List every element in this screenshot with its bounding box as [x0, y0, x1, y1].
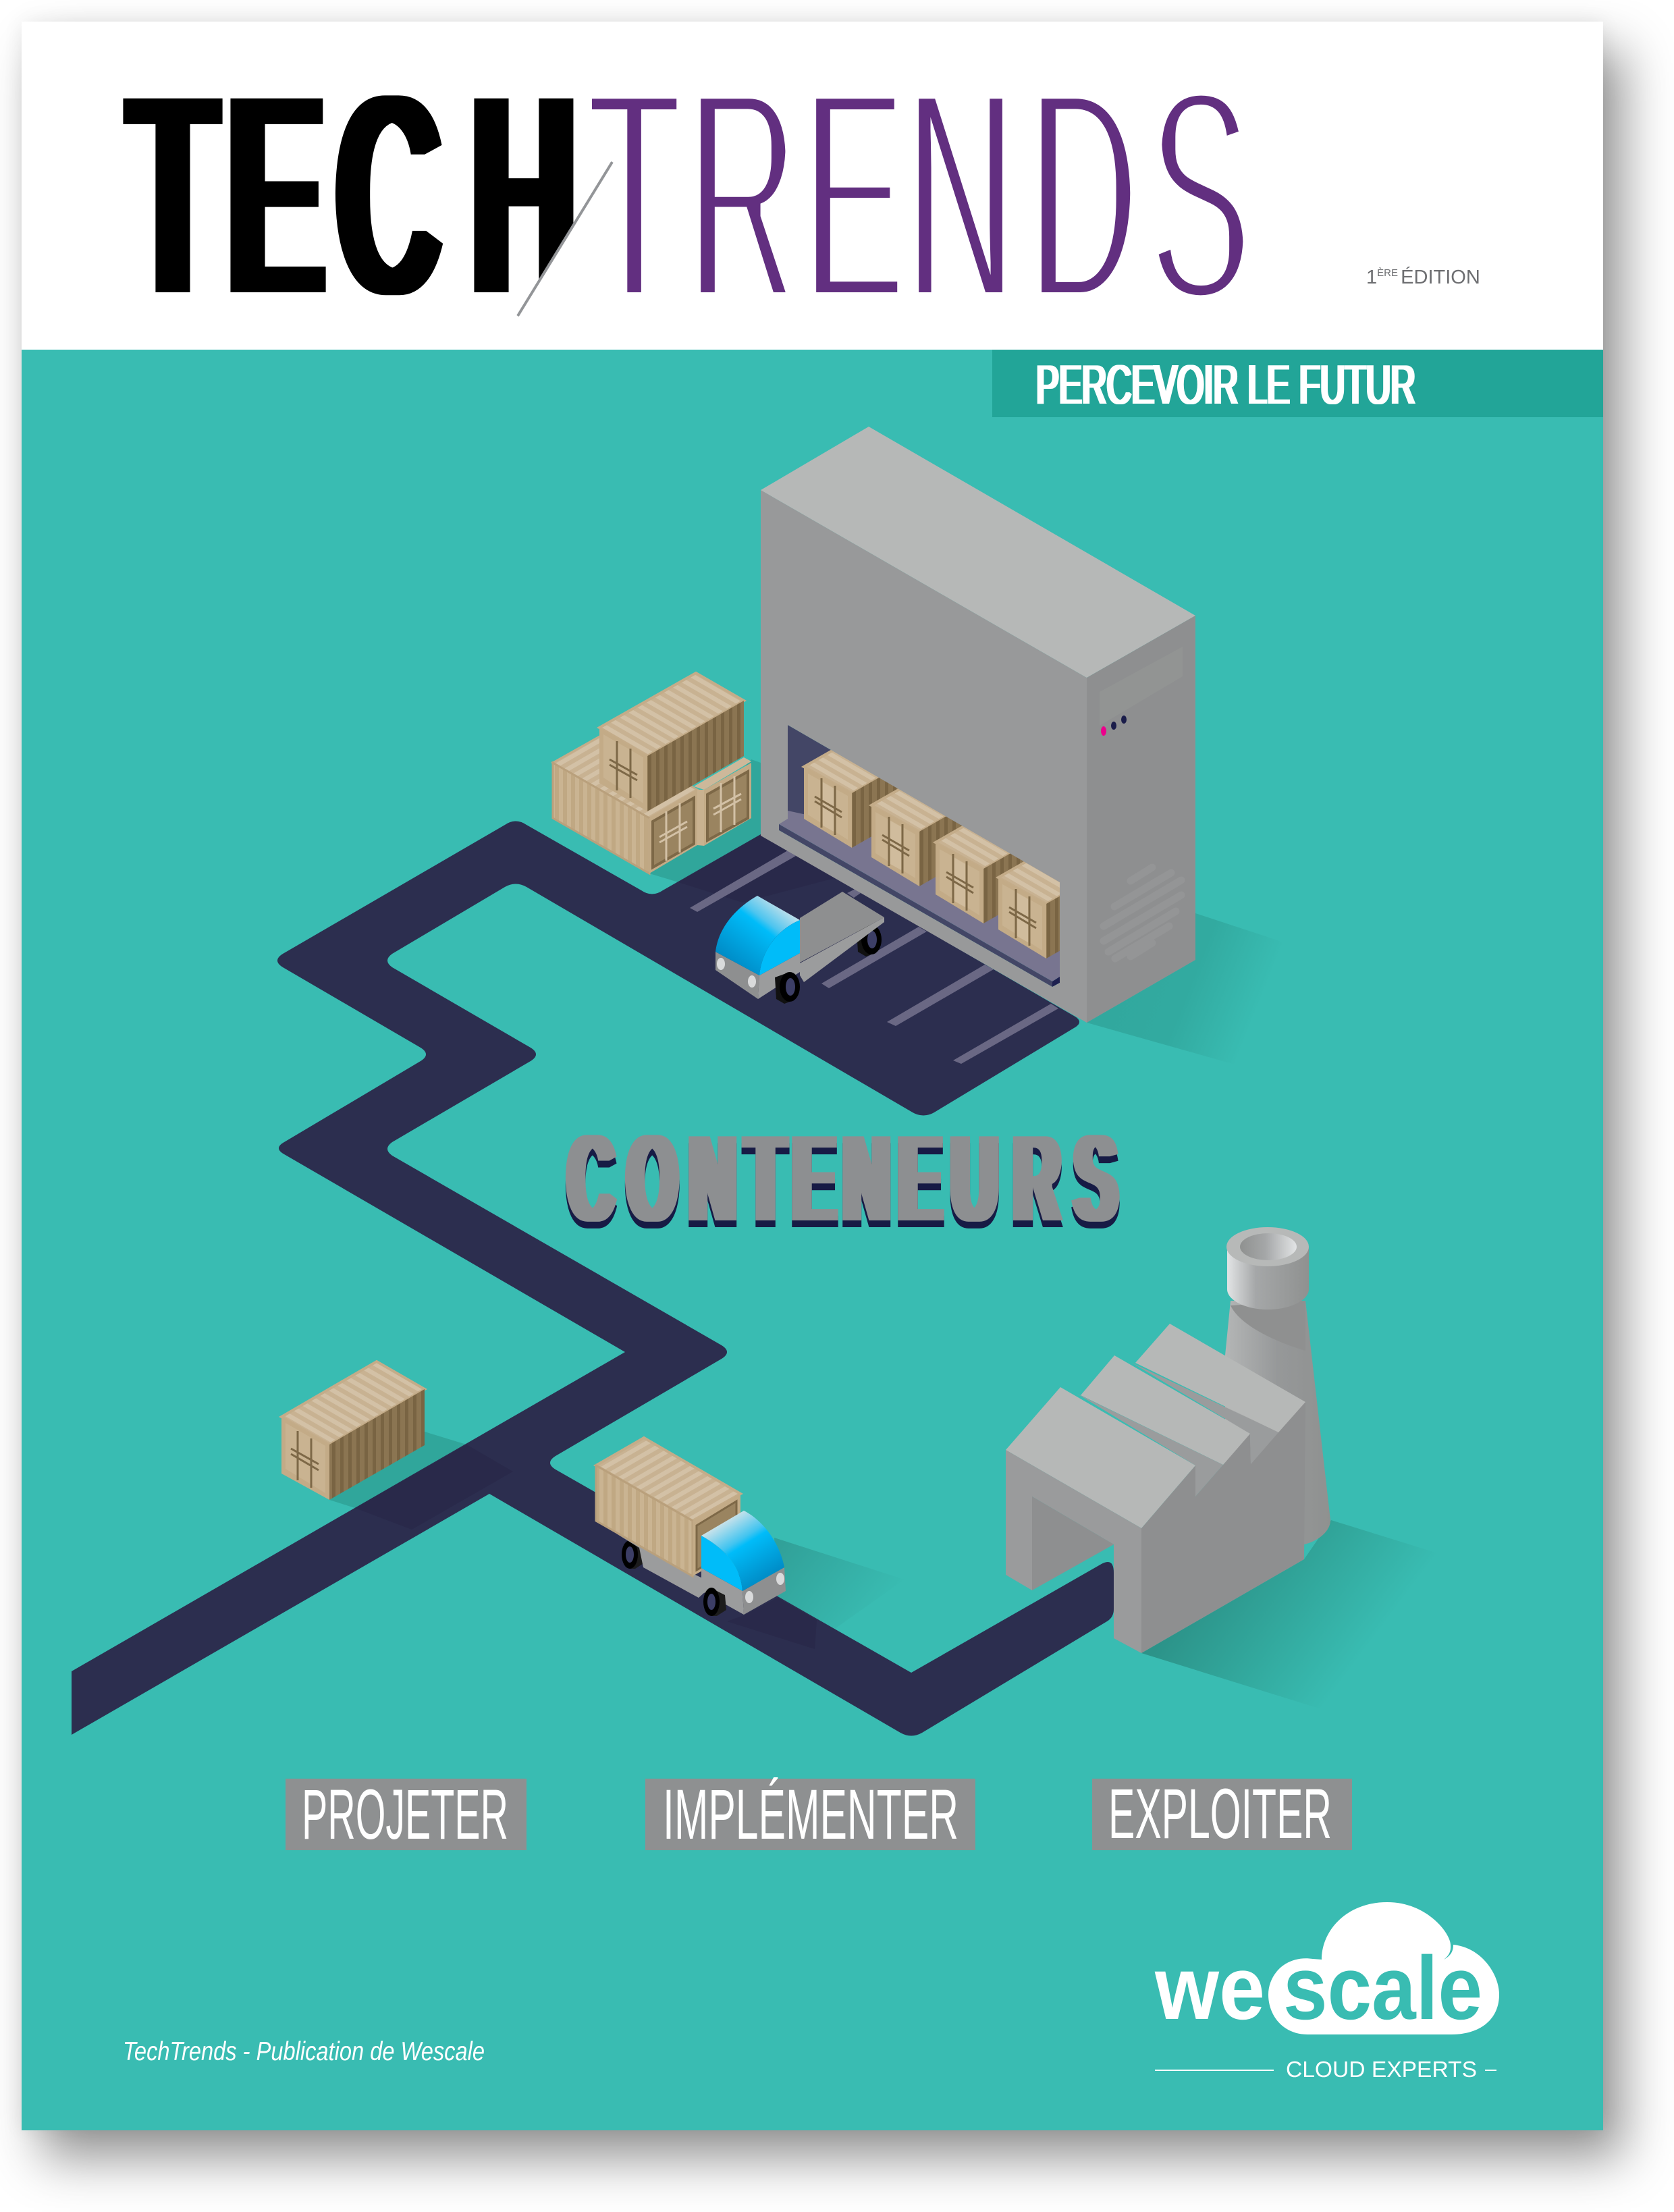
label: IMPLÉMENTER: IMPLÉMENTER — [663, 1775, 959, 1854]
label: IMPLÉMENTER — [645, 1775, 975, 1854]
building top face — [761, 427, 1195, 678]
side panel — [1100, 647, 1183, 726]
ventilation slots — [1104, 867, 1181, 959]
white header band — [22, 22, 1603, 350]
truck shadow on ground — [774, 1538, 905, 1638]
road shadows — [745, 834, 761, 844]
flatbed — [800, 892, 884, 982]
cab windscreen — [716, 896, 800, 975]
parking lines — [690, 851, 1058, 1064]
headlights — [745, 1573, 784, 1603]
right end container — [694, 757, 751, 846]
cab windscreen — [701, 1511, 784, 1591]
lower long container — [553, 736, 697, 873]
cab side window — [759, 920, 800, 975]
tagline: cloud experts: CLOUD EXPERTS — [1286, 2057, 1477, 2082]
loading bay interior — [779, 725, 1060, 987]
wescale logo — [1154, 1902, 1499, 2082]
label: EXPLOITER — [1092, 1775, 1352, 1854]
lone container shadow — [329, 1432, 466, 1508]
indicator lights — [1101, 716, 1127, 736]
road — [72, 821, 1114, 1736]
title: CONTENEURS: CONTENEURS — [568, 1108, 1116, 1249]
step labels — [286, 1775, 1352, 1854]
publication credit: TechTrends - Publication de Wescale — [123, 2037, 485, 2066]
crates in loading bay — [804, 713, 1141, 959]
building shadow — [1087, 913, 1343, 1067]
saw-tooth roof — [1006, 1324, 1305, 1528]
factory doorway — [1032, 1496, 1114, 1590]
title slash — [518, 162, 621, 317]
factory side wall — [1141, 1402, 1305, 1653]
chassis — [616, 1534, 705, 1598]
title: TRENDS: TRENDS — [589, 28, 1250, 362]
factory — [1006, 1227, 1330, 1653]
truck carrying container — [596, 1438, 786, 1616]
front wheel — [775, 972, 800, 1004]
factory front wall — [1006, 1450, 1141, 1653]
edition label: ÉDITION — [1401, 266, 1480, 288]
building front face — [761, 490, 1087, 1023]
edition label: ÈRE — [1377, 267, 1401, 279]
container stack — [553, 673, 751, 873]
label: EXPLOITER: EXPLOITER — [1108, 1775, 1332, 1854]
title: TECH: TECH — [128, 32, 576, 358]
edition label: 1 — [1366, 267, 1377, 288]
wordmark: scale: scale — [1283, 1939, 1482, 2039]
cab side window — [701, 1536, 742, 1591]
cab body — [716, 952, 800, 999]
label: PROJETER — [286, 1775, 526, 1854]
tagline banner: PERCEVOIR LE FUTUR — [1036, 353, 1415, 416]
warehouse building — [761, 427, 1195, 1023]
containers stack shadow — [649, 759, 761, 882]
rear wheel — [857, 925, 882, 956]
lone container — [281, 1361, 425, 1500]
truck container — [596, 1438, 740, 1576]
upper container — [599, 673, 744, 811]
front wheel — [703, 1588, 726, 1616]
cab body — [701, 1567, 786, 1615]
headlights — [717, 958, 756, 988]
chimney — [1225, 1227, 1330, 1544]
factory shadow — [1141, 1520, 1466, 1710]
rear wheel — [622, 1540, 645, 1569]
truck at warehouse — [716, 892, 884, 1004]
wordmark: we: we — [1154, 1939, 1265, 2039]
cloud — [1268, 1902, 1499, 2034]
building side face — [1087, 616, 1195, 1023]
label: PROJETER: PROJETER — [302, 1775, 508, 1854]
masthead title — [128, 28, 1250, 362]
